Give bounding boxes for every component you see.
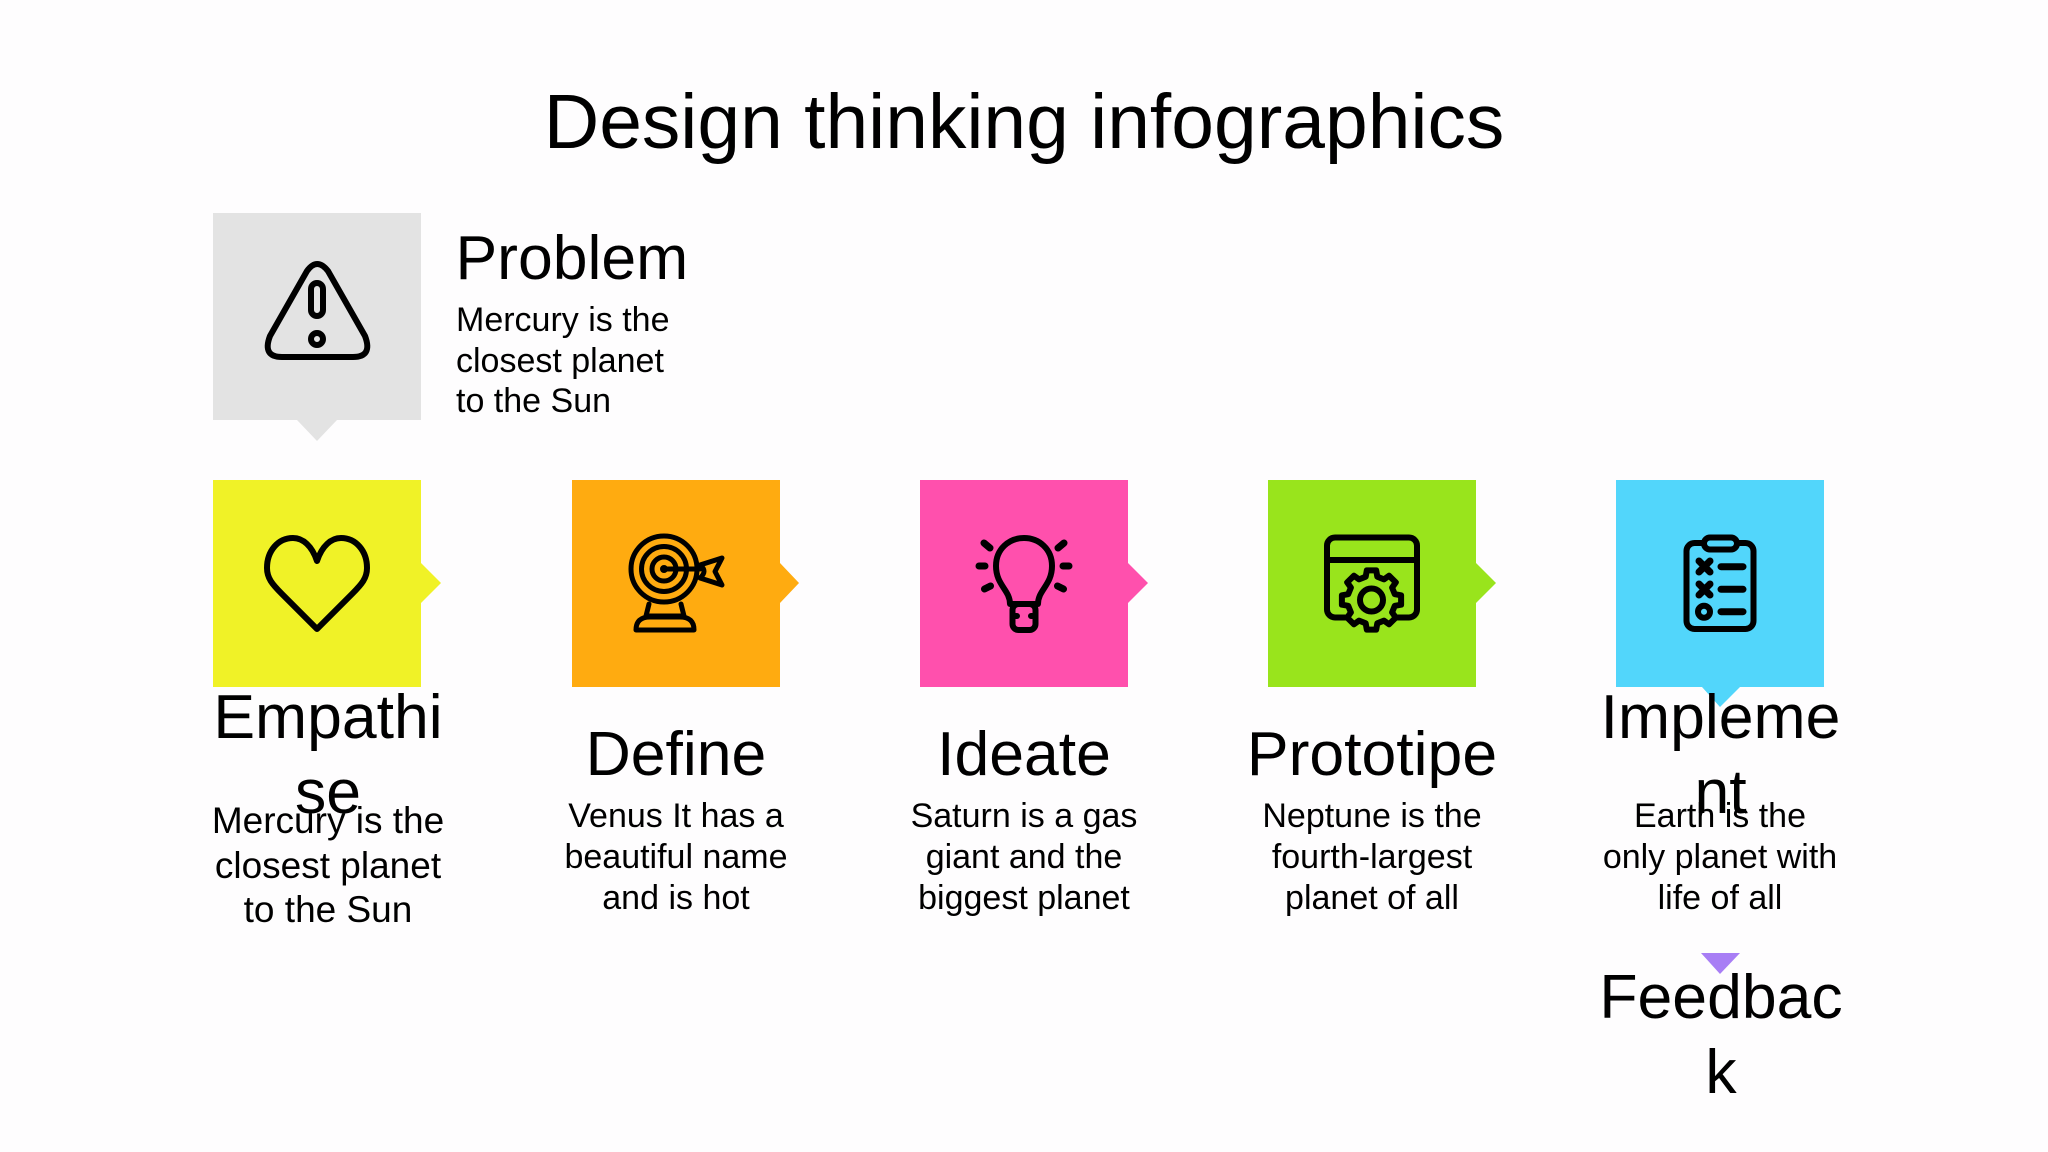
implement description: only planet with [1603,838,1837,876]
implement box with pointer [1616,480,1824,707]
ideate description: biggest planet [918,879,1130,917]
define description: beautiful name [564,838,788,876]
prototipe heading: Prototipe [1247,719,1497,789]
icon: window with gear [1327,538,1417,630]
empathise heading: se [295,757,361,827]
define box with arrow [572,480,799,687]
empathise box with arrow [213,480,441,687]
panel: problem [213,213,688,441]
problem description: to the Sun [456,382,611,420]
icon: warning triangle [268,264,367,357]
problem box with pointer [213,213,421,441]
define heading: Define [586,719,766,789]
panel: feedback [1599,953,1843,1107]
icon: heart [267,538,367,629]
ideate box with arrow [920,480,1148,687]
feedback pointer [1701,953,1740,974]
empathise description: to the Sun [244,889,412,930]
title: Design thinking infographics [544,79,1504,165]
empathise description: closest planet [215,845,442,886]
implement description: life of all [1658,879,1782,917]
empathise heading: Empathi [213,682,443,752]
define description: Venus It has a [568,797,784,835]
implement heading: Impleme [1601,682,1840,752]
icon: light bulb [979,538,1069,630]
prototipe description: fourth-largest [1272,838,1473,876]
problem description: closest planet [456,342,664,380]
implement description: Earth is the [1634,797,1806,835]
panel: implement [1601,480,1840,917]
empathise description: Mercury is the [212,800,444,841]
icon: clipboard checklist [1686,538,1754,629]
prototipe box with arrow [1268,480,1496,687]
problem description: Mercury is the [456,301,670,339]
icon: target with arrow [631,536,722,630]
ideate heading: Ideate [937,719,1111,789]
panel: ideate [911,480,1148,917]
implement heading: nt [1694,757,1747,827]
ideate description: giant and the [926,838,1122,876]
panel: prototipe [1247,480,1497,917]
problem heading: Problem [456,223,688,293]
define description: and is hot [602,879,750,917]
feedback heading: k [1705,1037,1737,1107]
panel: define [564,480,799,917]
feedback heading: Feedbac [1599,962,1843,1032]
prototipe description: planet of all [1285,879,1459,917]
ideate description: Saturn is a gas [911,797,1137,835]
panel: empathise [212,480,444,930]
prototipe description: Neptune is the [1262,797,1482,835]
